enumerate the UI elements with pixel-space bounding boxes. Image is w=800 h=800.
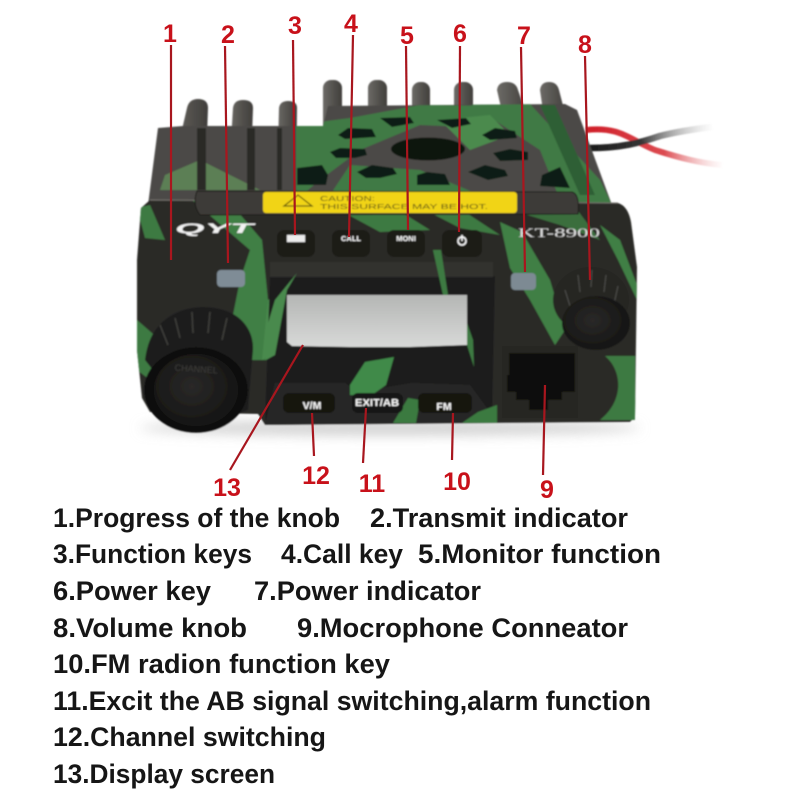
legend text: 13.Display screen <box>53 759 275 789</box>
monitor key <box>387 230 425 257</box>
channel knob: CHANNEL <box>174 363 218 375</box>
model label: KT-8900 <box>518 225 600 240</box>
callout numbers: 10 <box>443 468 471 496</box>
grille opening: speaker <box>391 138 465 160</box>
cooling fins <box>168 80 568 190</box>
soft floor shadow <box>140 421 640 435</box>
FM key <box>418 393 472 413</box>
microphone connector <box>502 346 578 418</box>
EXIT/AB key: EXIT/AB <box>355 398 399 409</box>
legend text: 4.Call key <box>281 539 403 569</box>
callout numbers: 12 <box>302 462 330 490</box>
callout numbers: 2 <box>221 21 235 49</box>
power indicator LED <box>511 273 536 290</box>
power cables <box>586 127 722 165</box>
camo streak left of screen <box>266 273 297 360</box>
legend text: 5.Monitor function <box>418 539 661 569</box>
legend text: 7.Power indicator <box>254 576 481 606</box>
legend text: 2.Transmit indicator <box>370 503 628 533</box>
radio photo illustration <box>137 80 722 435</box>
caution sticker: CAUTION: <box>320 194 375 203</box>
V/M key <box>283 393 335 413</box>
callout numbers <box>163 10 592 504</box>
callout numbers: 8 <box>578 31 592 59</box>
call key <box>332 230 370 257</box>
callout numbers: 11 <box>359 470 385 498</box>
legend text: 10.FM radion function key <box>53 649 390 679</box>
camo streak above screen <box>433 250 448 295</box>
transmit indicator LED <box>217 270 245 287</box>
QYT logo: QYT <box>175 220 257 236</box>
camo sliver right of screen <box>467 323 474 367</box>
power key <box>442 230 482 257</box>
warning panel <box>195 191 578 215</box>
heat sink deck with speaker grille <box>148 104 612 205</box>
callout numbers: 3 <box>288 12 302 40</box>
lower strip camo <box>393 398 497 423</box>
left fin slots <box>197 128 282 190</box>
bezel top stripe <box>270 262 493 277</box>
caution sticker: THIS SURFACE MAY BE HOT. <box>320 202 488 211</box>
legend text: 6.Power key <box>53 576 211 606</box>
monitor key: MONI <box>396 234 416 243</box>
callout numbers: 4 <box>344 10 358 38</box>
top bevel highlight <box>150 200 618 203</box>
lower key strip <box>265 383 492 425</box>
EXIT/AB key <box>352 393 403 413</box>
V/M key: V/M <box>303 400 322 412</box>
callout numbers: 13 <box>213 474 241 502</box>
callout numbers: 1 <box>163 20 177 48</box>
channel knob <box>144 307 253 433</box>
caution sticker <box>263 192 517 213</box>
callout numbers: 6 <box>453 20 467 48</box>
LCD screen <box>287 295 467 347</box>
legend text: 12.Channel switching <box>53 722 326 752</box>
front housing <box>137 200 637 425</box>
side block camo <box>600 356 635 420</box>
legend text: 8.Volume knob <box>53 613 247 643</box>
legend text: 1.Progress of the knob <box>53 503 340 533</box>
legend text <box>53 503 661 789</box>
call key: CALL <box>341 234 361 243</box>
legend text: 3.Function keys <box>53 539 252 569</box>
callout lines <box>171 35 590 475</box>
callout numbers: 9 <box>540 476 554 504</box>
function key 3 <box>277 230 315 257</box>
bezel camo accents <box>350 357 394 395</box>
FM key: FM <box>436 401 452 413</box>
legend text: 9.Mocrophone Conneator <box>297 613 628 643</box>
display bezel <box>265 276 495 420</box>
connector side block <box>578 353 635 420</box>
grille vent holes <box>297 117 570 188</box>
legend text: 11.Excit the AB signal switching,alarm function <box>53 686 651 716</box>
callout numbers: 7 <box>517 22 531 50</box>
callout numbers: 5 <box>400 22 414 50</box>
volume knob <box>553 267 630 350</box>
